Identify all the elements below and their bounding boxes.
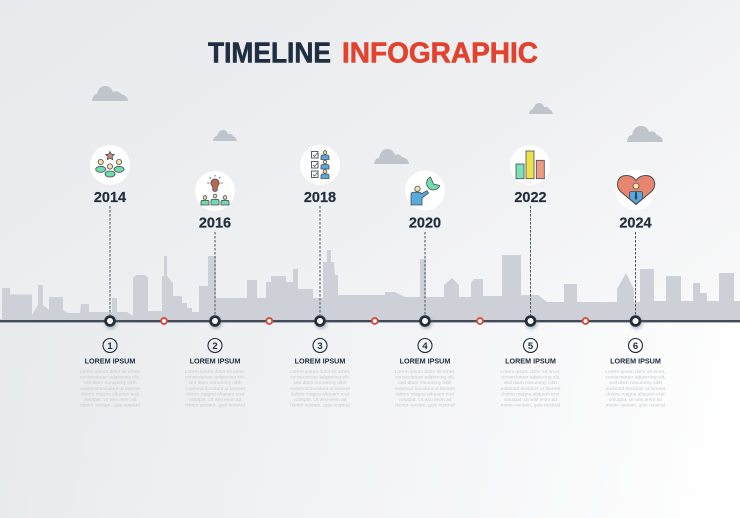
connector [634,232,636,315]
year: 2016 [199,216,231,232]
title: INFOGRAPHIC [342,38,538,70]
body text: dolore magna aliquam erat [81,391,140,397]
body text: volutpat. Ut wisi enim ad [609,397,662,403]
node [526,317,538,329]
number [628,338,642,352]
body text: consectetuer adipiscing elit, [395,375,455,381]
milestone 2018 [290,145,351,409]
body text: sed diam nonummy nibh [293,380,347,386]
year: 2024 [619,216,652,232]
number [524,338,538,352]
connector [214,232,216,315]
node [210,317,222,329]
body text: minim veniam, quis nostrud [501,403,561,409]
body text: dolore magna aliquam erat [186,391,245,397]
milestone 2024 [605,170,666,409]
title: TIMELINE [208,38,331,70]
connector [109,206,111,315]
number: 1 [107,341,113,352]
body text: minim veniam, quis nostrud [80,403,140,409]
body text: minim veniam, quis nostrud [606,403,666,409]
body text: sed diam nonummy nibh [609,380,662,386]
node [420,317,432,329]
milestone 2020 [395,170,456,409]
number: 5 [528,341,534,352]
red intermediate markers [161,318,588,324]
connector [319,206,321,315]
icon: heart with person [616,170,656,210]
heading: LOREM IPSUM [610,357,661,366]
body text: sed diam nonummy nibh [398,380,452,386]
body text: Lorem ipsum dolor sit amet, [395,369,455,375]
number: 4 [422,341,428,352]
body text: volutpat. Ut wisi enim ad [83,397,137,403]
city skyline [0,250,740,321]
milestone 2022 [500,145,561,409]
body text: minim veniam, quis nostrud [290,403,350,409]
icon: team with star [90,145,130,185]
body text: Lorem ipsum dolor sit amet, [290,369,350,375]
heading: LOREM IPSUM [295,357,345,366]
node [315,317,327,329]
number [313,338,327,352]
body text: dolore magna aliquam erat [606,391,665,397]
body text: Lorem ipsum dolor sit amet, [605,369,666,375]
body text: sed diam nonummy nibh [188,380,242,386]
node [630,317,642,329]
body text: sed diam nonummy nibh [504,380,557,386]
body text: euismod tincidunt ut laoreet [501,386,561,392]
body text: consectetuer adipiscing elit, [80,375,140,381]
number: 6 [633,341,638,352]
number [208,338,222,352]
node [105,317,117,329]
body text: dolore magna aliquam erat [291,391,350,397]
body text: consectetuer adipiscing elit, [500,375,561,381]
body text: euismod tincidunt ut laoreet [606,386,666,392]
heading: LOREM IPSUM [85,357,135,366]
body text: minim veniam, quis nostrud [185,403,245,409]
body text: sed diam nonummy nibh [83,380,137,386]
body text: euismod tincidunt ut laoreet [395,386,456,392]
icon: presenter with pie chart [405,170,445,210]
year: 2014 [94,190,126,206]
body text: euismod tincidunt ut laoreet [80,386,141,392]
milestone 2016 [185,171,246,409]
icon: idea and team [195,171,235,211]
timeline axis [0,320,740,322]
year: 2018 [304,190,336,206]
heading: LOREM IPSUM [190,357,240,366]
body text: dolore magna aliquam erat [501,391,560,397]
body text: euismod tincidunt ut laoreet [290,386,351,392]
milestone 2014 [80,145,141,409]
body text: volutpat. Ut wisi enim ad [188,397,242,403]
body text: Lorem ipsum dolor sit amet, [500,369,561,375]
year: 2020 [409,216,441,232]
number: 2 [212,341,218,352]
body text: consectetuer adipiscing elit, [290,375,350,381]
body text: Lorem ipsum dolor sit amet, [185,369,245,375]
heading: LOREM IPSUM [400,357,450,366]
icon: checklist and people [300,145,340,185]
body text: volutpat. Ut wisi enim ad [293,397,347,403]
title [208,38,538,70]
body text: consectetuer adipiscing elit, [185,375,245,381]
number: 3 [317,341,323,352]
body text: euismod tincidunt ut laoreet [185,386,246,392]
body text: Lorem ipsum dolor sit amet, [80,369,140,375]
number [418,338,432,352]
number [103,338,117,352]
body text: volutpat. Ut wisi enim ad [504,397,557,403]
connector [424,232,426,315]
icon: bar chart [510,145,550,185]
heading: LOREM IPSUM [505,357,556,366]
body text: dolore magna aliquam erat [396,391,455,397]
connector [530,206,532,315]
body text: volutpat. Ut wisi enim ad [398,397,452,403]
year: 2022 [514,190,547,206]
clouds [92,86,663,164]
body text: consectetuer adipiscing elit, [605,375,666,381]
body text: minim veniam, quis nostrud [395,403,455,409]
